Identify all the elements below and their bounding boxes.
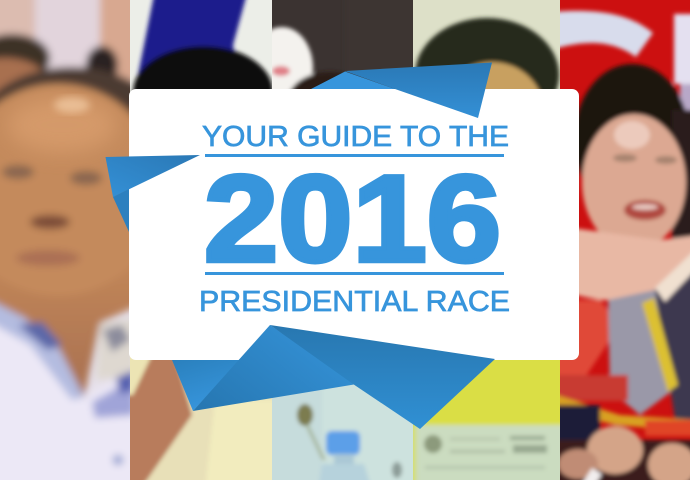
heading: your guide to the: YOUR GUIDE TO THE [202, 121, 509, 153]
heading: presidential race: PRESIDENTIAL RACE [199, 286, 510, 318]
rule below year [205, 272, 504, 275]
photo: man, left column [0, 0, 130, 480]
white title panel [129, 89, 579, 360]
heading: year 2016: 2016 [204, 151, 501, 288]
photo: man with yellow background and document, fourth column [413, 0, 560, 480]
photo: flag and arm, second column [130, 0, 272, 480]
top ribbon [311, 62, 492, 118]
bottom ribbon [172, 325, 495, 429]
left ribbon [106, 155, 200, 232]
photo: dark backdrop and bottle, third column [272, 0, 413, 480]
photo: woman on red backdrop, right column [550, 0, 690, 480]
rule above year [205, 154, 504, 157]
